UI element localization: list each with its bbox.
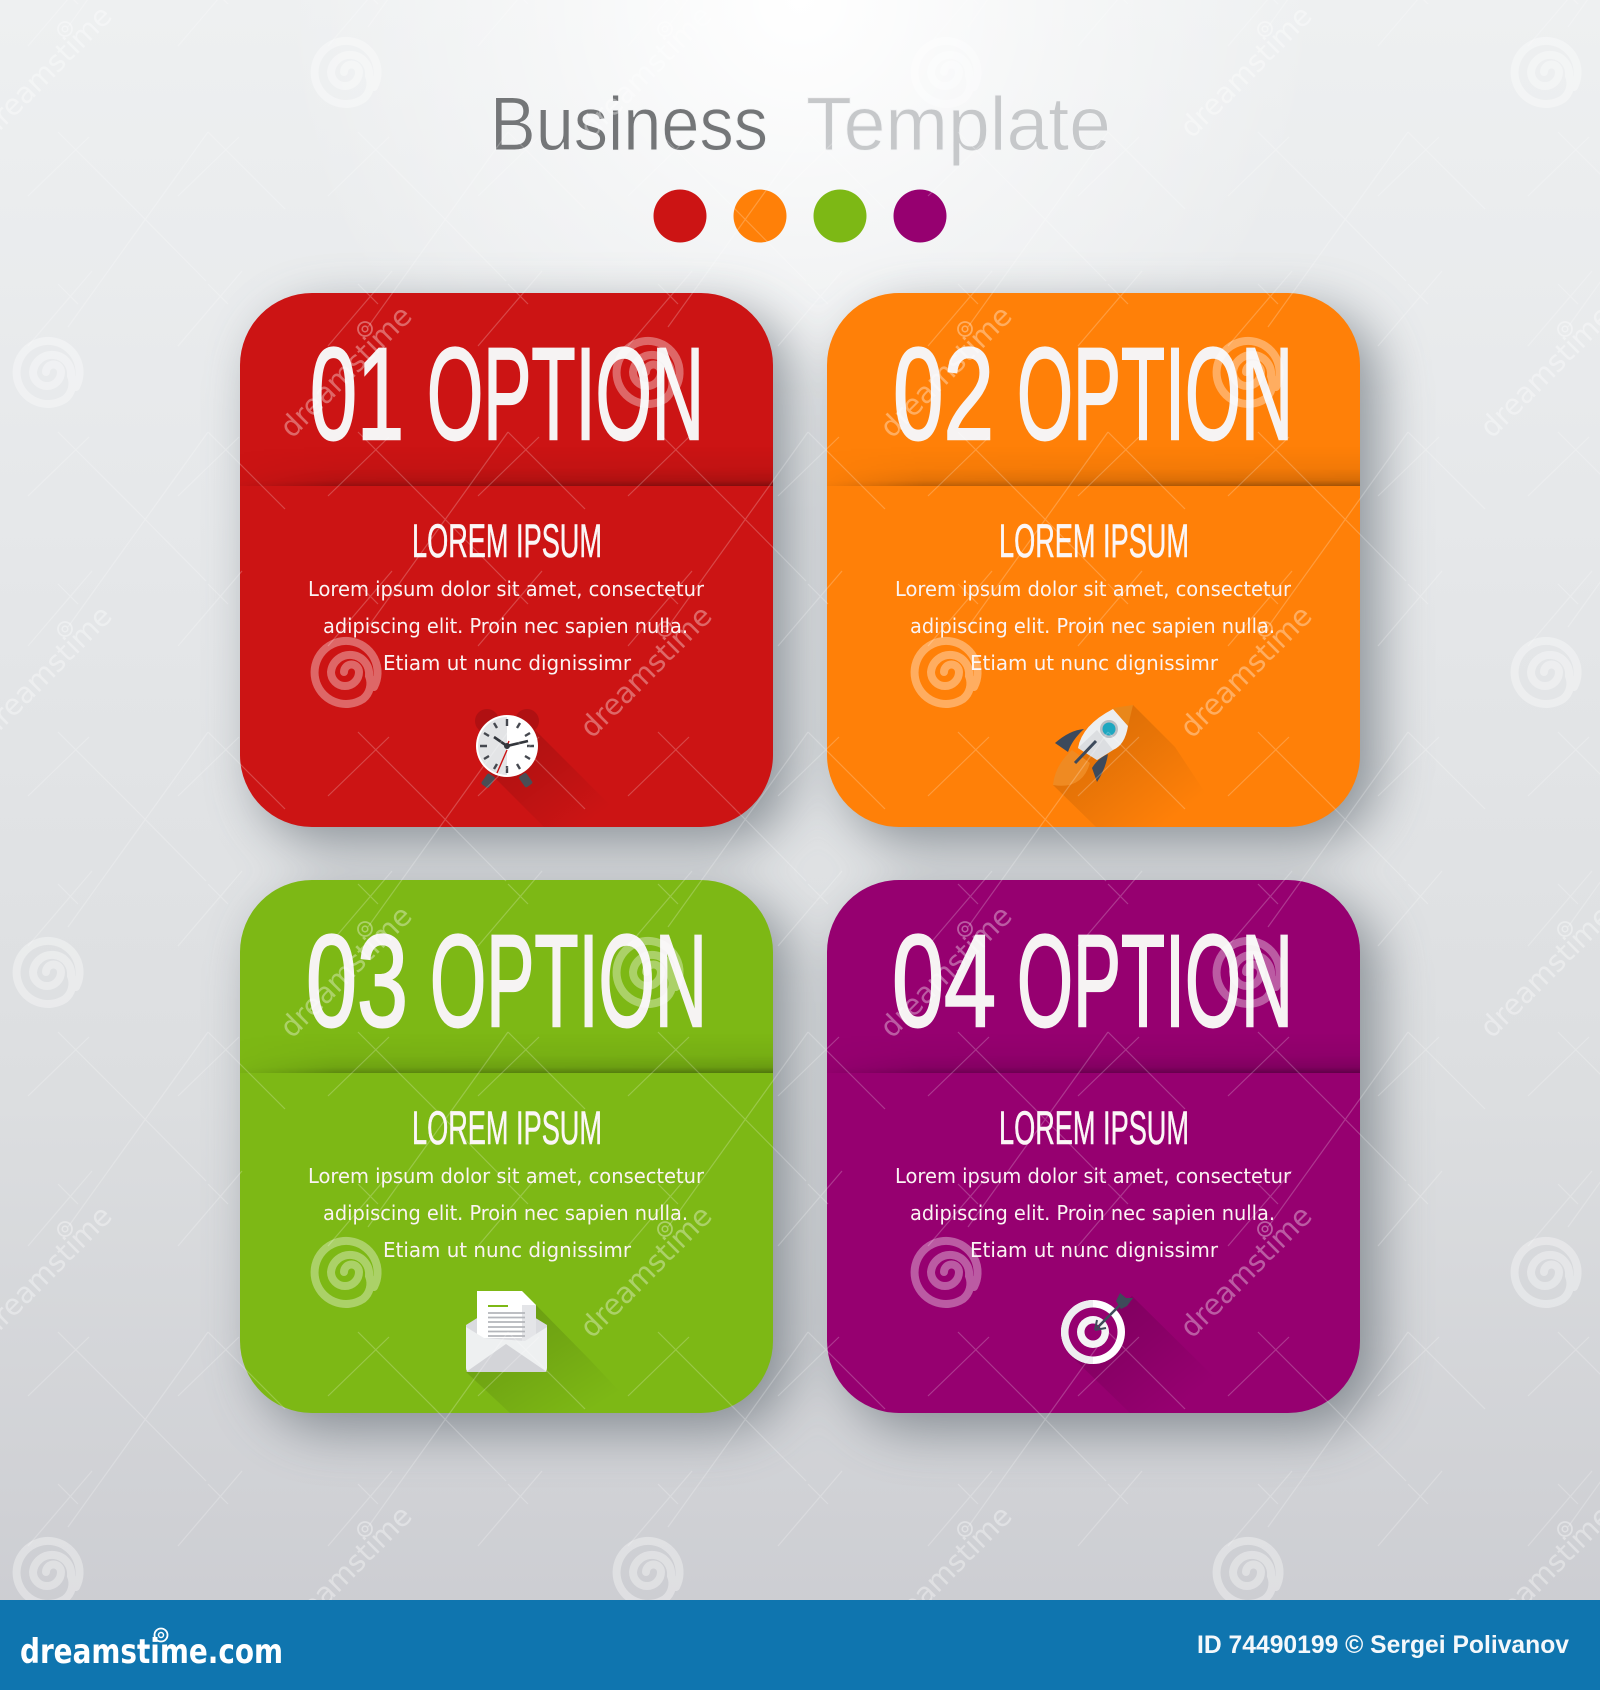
body text: adipiscing elit. Proin nec sapien nulla. xyxy=(910,1201,1275,1225)
icon: target xyxy=(1061,1293,1182,1399)
heading: 02 option: OPTION xyxy=(1017,320,1293,467)
body text: Etiam ut nunc dignissimr xyxy=(383,651,632,675)
panel: 04 option xyxy=(827,880,1360,1413)
body text: Lorem ipsum dolor sit amet, consectetur xyxy=(308,577,705,601)
title: Business xyxy=(490,82,768,167)
body text: Etiam ut nunc dignissimr xyxy=(970,651,1219,675)
heading: 04 option: 04 xyxy=(892,907,996,1054)
heading: 03 option xyxy=(306,907,707,1054)
panel: 03 option xyxy=(240,880,773,1413)
heading: 01 option xyxy=(310,320,704,467)
watermark overlay: dreamstime xyxy=(1173,1199,1319,1344)
icon: alarm clock xyxy=(475,709,588,821)
colour dots xyxy=(654,190,946,242)
watermark overlay: dreamstime xyxy=(873,899,1019,1044)
icon: rocket xyxy=(1053,705,1190,827)
body text: Etiam ut nunc dignissimr xyxy=(970,1238,1219,1262)
body text: adipiscing elit. Proin nec sapien nulla. xyxy=(323,1201,688,1225)
panel: 02 option xyxy=(827,293,1360,827)
heading: 01 option: OPTION xyxy=(427,320,704,467)
body text: Lorem ipsum dolor sit amet, consectetur xyxy=(895,1164,1292,1188)
icon: envelope xyxy=(466,1291,594,1413)
heading: 01 option: 01 xyxy=(310,320,404,467)
body text: adipiscing elit. Proin nec sapien nulla. xyxy=(910,614,1275,638)
body text xyxy=(308,577,705,675)
panel: 01 option xyxy=(240,293,773,827)
watermark overlay: dreamstime xyxy=(573,599,719,744)
heading: 03 option: 03 xyxy=(306,907,408,1054)
watermark overlay: dreamstime xyxy=(573,0,719,144)
heading: 04 option xyxy=(892,907,1293,1054)
subheading: LOREM IPSUM xyxy=(412,514,602,567)
subheading: LOREM IPSUM xyxy=(999,514,1189,567)
watermark overlay: dreamstime xyxy=(873,299,1019,444)
heading: 04 option: OPTION xyxy=(1017,907,1293,1054)
body text xyxy=(895,577,1292,675)
subheading: LOREM IPSUM xyxy=(999,1101,1189,1154)
body text xyxy=(308,1164,705,1262)
watermark overlay: dreamstime xyxy=(573,1199,719,1344)
subheading: LOREM IPSUM xyxy=(412,1101,602,1154)
watermark overlay: dreamstime xyxy=(1173,599,1319,744)
watermark overlay: dreamstime xyxy=(273,1499,419,1644)
title xyxy=(490,82,1111,167)
body text: adipiscing elit. Proin nec sapien nulla. xyxy=(323,614,688,638)
body text: Etiam ut nunc dignissimr xyxy=(383,1238,632,1262)
heading: 03 option: OPTION xyxy=(430,907,707,1054)
footer logo: dreamstime.com xyxy=(20,1632,283,1672)
watermark overlay: dreamstime xyxy=(273,899,419,1044)
heading: 02 option xyxy=(893,320,1293,467)
watermark overlay: dreamstime xyxy=(1173,0,1319,144)
body text xyxy=(895,1164,1292,1262)
body text: Lorem ipsum dolor sit amet, consectetur xyxy=(895,577,1292,601)
title: Template xyxy=(806,82,1111,167)
heading: 02 option: 02 xyxy=(893,320,994,467)
watermark overlay: dreamstime xyxy=(873,1499,1019,1644)
card shadows xyxy=(258,310,1378,1430)
image id and credit: ID 74490199 © Sergei Polivanov xyxy=(1197,1631,1569,1659)
watermark overlay: dreamstime xyxy=(273,299,419,444)
body text: Lorem ipsum dolor sit amet, consectetur xyxy=(308,1164,705,1188)
footer bar xyxy=(0,1600,1600,1690)
